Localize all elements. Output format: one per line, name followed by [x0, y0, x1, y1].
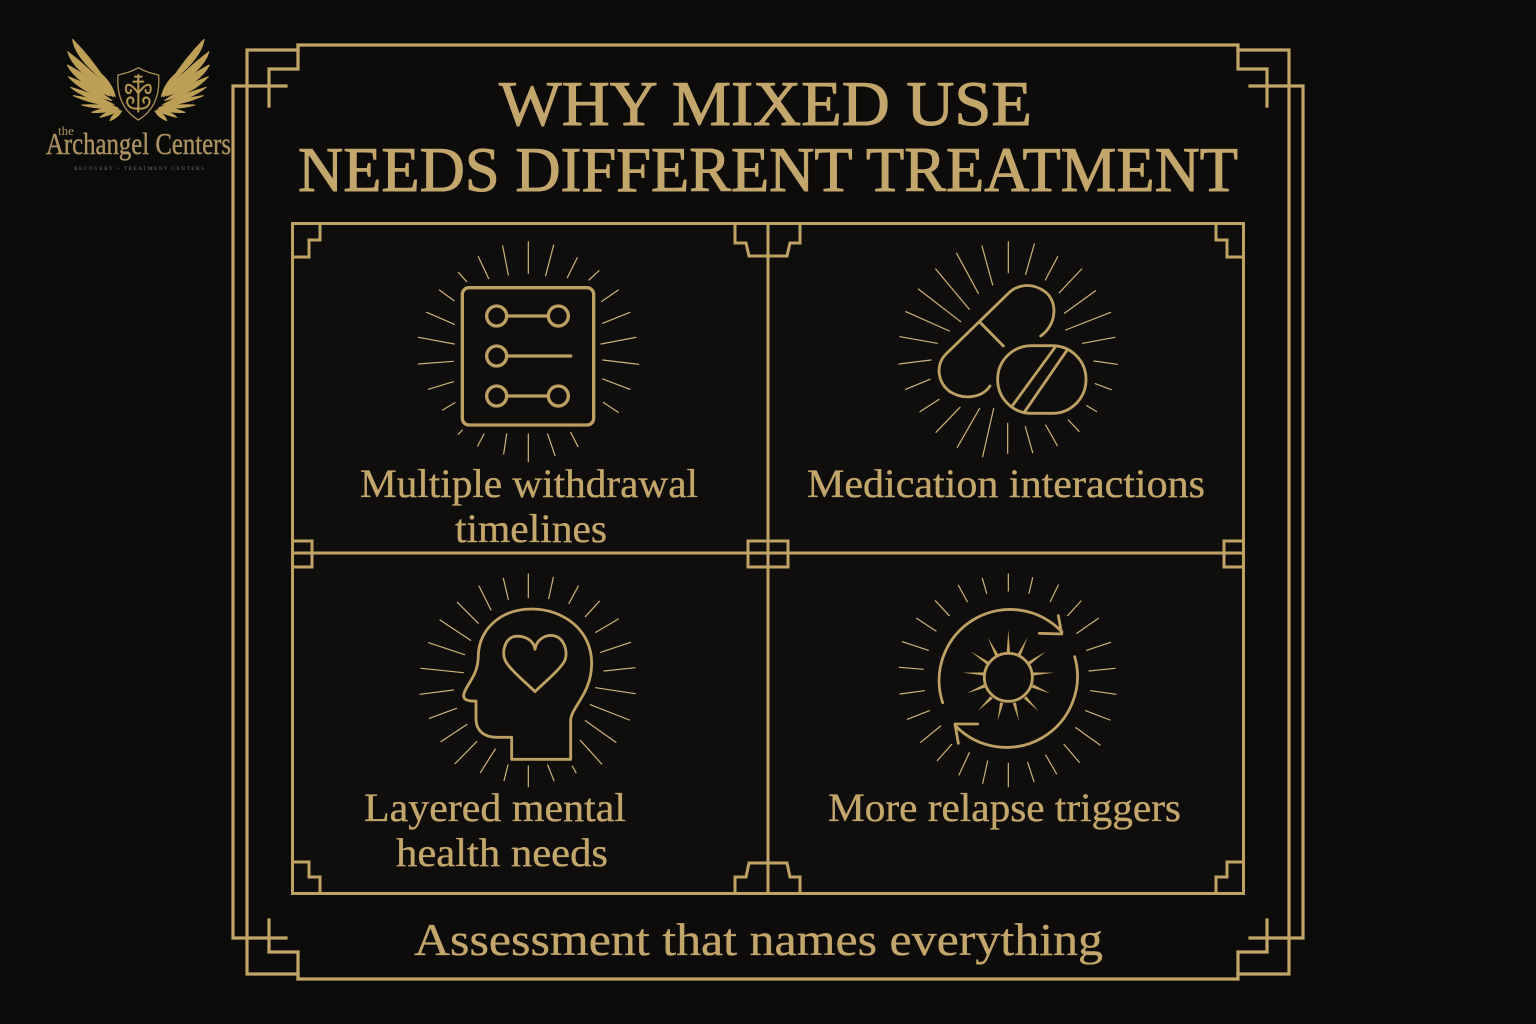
logo tagline: RECOVERY + TREATMENT CENTERS: [74, 166, 204, 172]
label: layered mental health needs: Layered mental: [364, 785, 626, 830]
icon: sun in cycle arrows with rays: [899, 574, 1116, 787]
label: multiple withdrawal timelines: timelines: [455, 506, 607, 551]
title: [298, 69, 1238, 205]
title line 1: WHY MIXED USE: [499, 69, 1032, 139]
panel: layered mental health needs: [364, 574, 635, 875]
icon: capsule and tablet with rays: [899, 242, 1117, 457]
fleur-de-lis: [126, 75, 151, 112]
icon: timeline chart with rays: [418, 242, 639, 462]
outer art deco frame: [233, 45, 1303, 979]
panel: medication interactions: [807, 242, 1205, 506]
label: multiple withdrawal timelines: [360, 461, 698, 551]
label: layered mental health needs: [364, 785, 626, 875]
left wing: [67, 39, 122, 121]
label: multiple withdrawal timelines: Multiple withdrawal: [360, 461, 698, 506]
label: more relapse triggers: More relapse triggers: [828, 785, 1181, 830]
logo: The Archangel Centers: [46, 39, 231, 172]
logo emblem: winged shield: [67, 39, 209, 121]
icon: head with heart and rays: [420, 574, 635, 787]
label: layered mental health needs: health needs: [396, 830, 608, 875]
shield: [118, 68, 159, 120]
logo word: the: the: [58, 123, 74, 138]
right wing: [155, 39, 209, 121]
title line 2: NEEDS DIFFERENT TREATMENT: [298, 135, 1238, 205]
label: medication interactions: Medication interactions: [807, 461, 1205, 506]
panel: more relapse triggers: [828, 574, 1181, 830]
logo wordmark: Archangel Centers: [46, 126, 231, 161]
panel: multiple withdrawal timelines: [360, 242, 698, 551]
four panel grid frame: [292, 223, 1244, 894]
footer: assessment statement: Assessment that names everything: [414, 914, 1103, 965]
